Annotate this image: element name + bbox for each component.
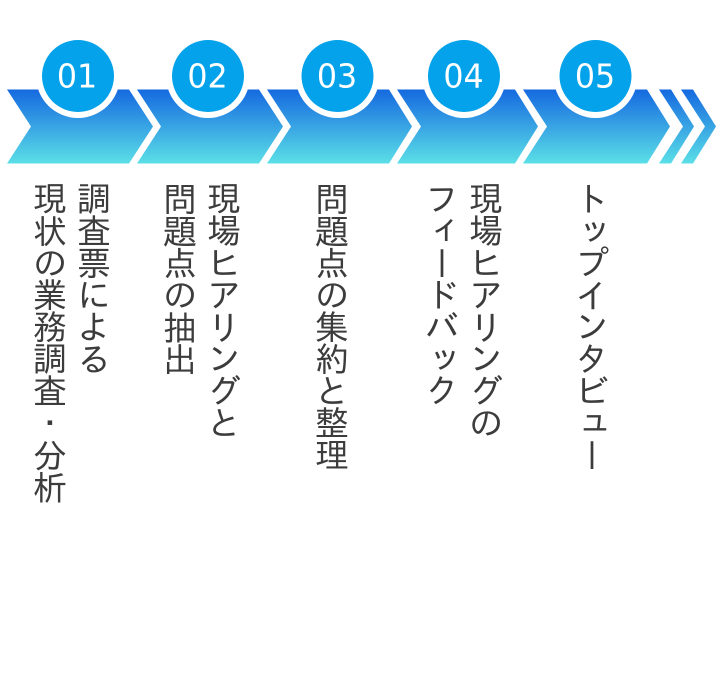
badge 03: 03 xyxy=(317,57,357,95)
badge 02 xyxy=(166,34,250,118)
step 1 label: 調査票による xyxy=(77,181,111,373)
step 1 chevron xyxy=(7,90,153,164)
step 3 label: 問題点の集約と整理 xyxy=(315,181,349,469)
badge 02: 02 xyxy=(187,57,228,95)
badge 03 xyxy=(296,34,380,118)
trailing chevron 1 xyxy=(659,90,694,164)
step 2 chevron xyxy=(137,90,283,164)
badge 01: 01 xyxy=(57,57,97,95)
step 1 label xyxy=(33,181,111,503)
step 5 chevron xyxy=(523,90,670,164)
badge 05 xyxy=(554,34,638,118)
step 4 label: 現場ヒアリングの xyxy=(469,181,503,437)
step 2 label xyxy=(163,181,241,437)
step 3 chevron xyxy=(267,90,412,164)
step 4 chevron xyxy=(397,90,538,164)
badge 04 xyxy=(422,34,506,118)
step 1 label: 現状の業務調査・分析 xyxy=(33,181,67,501)
badge 01 xyxy=(36,34,120,118)
step 4 label xyxy=(425,181,503,437)
step 2 label: 現場ヒアリングと xyxy=(207,181,241,437)
trailing chevron 2 xyxy=(681,90,716,164)
step 5 label: トップインタビュー xyxy=(575,181,609,469)
step 4 label: フィードバック xyxy=(425,181,459,405)
badge 05: 05 xyxy=(575,57,615,95)
step 2 label: 問題点の抽出 xyxy=(163,181,197,373)
badge 04: 04 xyxy=(443,57,484,95)
